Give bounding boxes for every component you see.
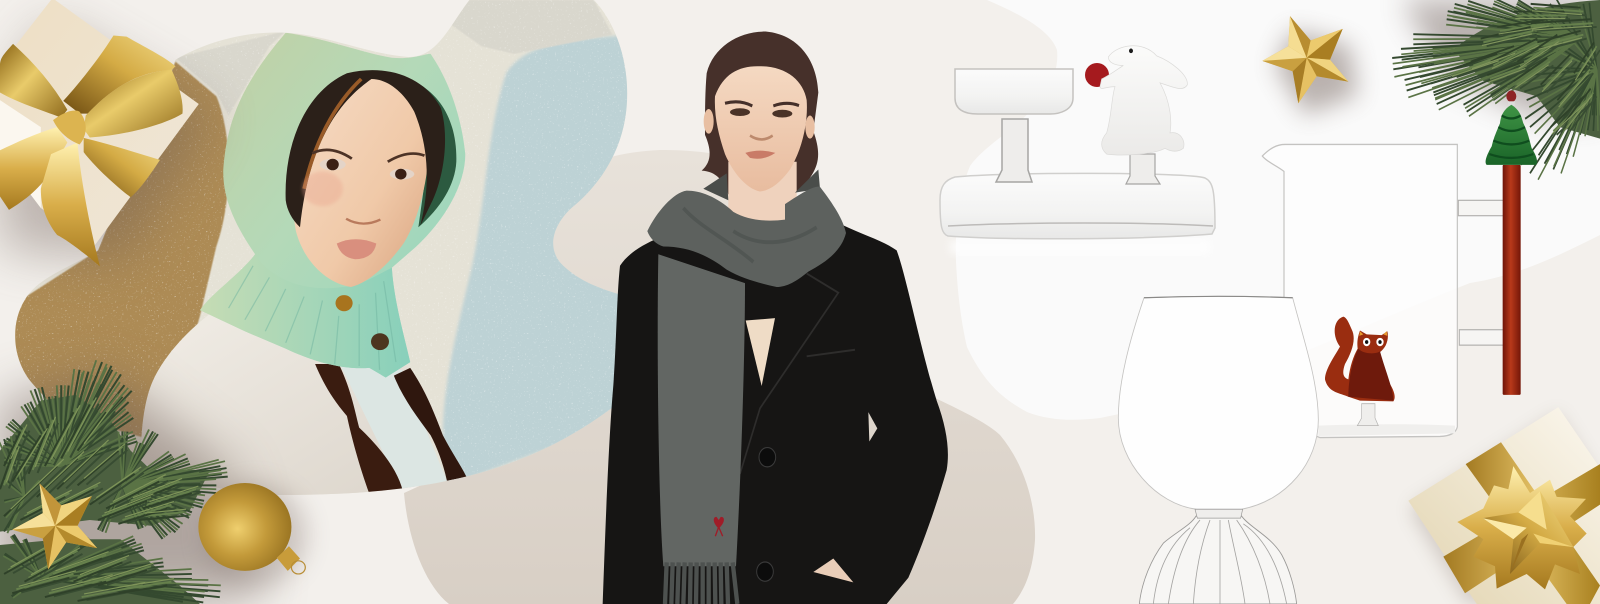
hood interior xyxy=(418,85,456,227)
gift shadow xyxy=(1408,414,1600,604)
blush xyxy=(302,171,343,206)
dark hair xyxy=(286,70,445,227)
base reflection xyxy=(950,240,1210,254)
lips xyxy=(745,151,775,159)
gold bauble xyxy=(198,483,305,574)
hair and bun xyxy=(702,32,818,195)
left photo: woman in mint knit hood xyxy=(0,0,640,501)
eyebrows xyxy=(312,150,424,162)
black coat xyxy=(603,225,948,604)
wine glass fluted foot xyxy=(1139,516,1297,604)
glass squirrel figurine xyxy=(1325,317,1395,401)
white background blob xyxy=(956,0,1600,420)
button two xyxy=(757,562,773,581)
bunny stem xyxy=(1126,154,1160,184)
neck xyxy=(728,162,797,320)
right braid xyxy=(394,368,467,481)
orange hair highlight xyxy=(304,79,361,189)
knit hood and neck xyxy=(200,33,465,377)
pale blue inner top xyxy=(341,366,447,491)
ribbed collar xyxy=(200,254,410,377)
red handle rod xyxy=(1503,165,1521,395)
box bright corner xyxy=(0,100,41,208)
nose xyxy=(750,136,773,139)
button one xyxy=(759,448,776,467)
armhole gap xyxy=(868,412,877,441)
short branch needles xyxy=(1451,4,1600,135)
solid branch mass xyxy=(0,395,210,604)
vertical ribbon band xyxy=(1466,442,1600,604)
jug base reflection xyxy=(1318,424,1455,436)
mid needles xyxy=(0,359,230,598)
scarf fringe xyxy=(665,562,737,604)
pine branches bottom left xyxy=(0,358,305,604)
right photo: person in black coat and grey scarf xyxy=(603,32,948,604)
top right shadow and pine xyxy=(1390,0,1600,182)
eyes xyxy=(730,108,792,117)
short branch needles xyxy=(0,398,201,601)
box body xyxy=(1408,407,1600,604)
wine glass bowl xyxy=(1118,296,1318,509)
foot flutes xyxy=(1153,520,1287,604)
scarf wrap xyxy=(647,187,846,287)
wine glass rim xyxy=(1144,296,1293,298)
blue wall shadow xyxy=(443,35,637,485)
squirrel and wine glass xyxy=(1118,296,1395,604)
hanging scarf xyxy=(658,254,745,566)
glass tree topper xyxy=(1486,91,1537,165)
gift box top left xyxy=(0,0,199,267)
solid branch mass xyxy=(1453,0,1600,139)
glass candle holder xyxy=(940,63,1215,254)
top star shadow xyxy=(1275,30,1358,115)
face xyxy=(293,73,429,287)
glitter specks xyxy=(0,0,640,501)
glass plate xyxy=(940,173,1215,239)
glass stem xyxy=(996,119,1032,182)
gold star bow xyxy=(1457,466,1587,589)
lapel seam xyxy=(740,273,855,474)
left braid xyxy=(315,364,403,494)
inner cream top xyxy=(746,318,775,386)
glass cup xyxy=(955,69,1073,114)
white bunny figurine xyxy=(1100,46,1187,155)
plate rim line xyxy=(948,223,1213,226)
mid needles xyxy=(1392,0,1600,182)
cross ribbon band xyxy=(1443,464,1600,593)
hand in pocket xyxy=(813,559,853,582)
jug upper handle xyxy=(1458,200,1504,216)
right ear xyxy=(805,116,815,139)
photo backdrop xyxy=(28,0,616,480)
lips xyxy=(337,239,376,259)
pine shadow xyxy=(1400,0,1600,116)
bunny eye xyxy=(1129,49,1133,53)
dark needles xyxy=(1390,0,1600,173)
red ball xyxy=(1085,63,1109,87)
jug, bunny and glass xyxy=(1100,46,1521,438)
golden wall shadow xyxy=(8,62,229,443)
taupe background blob xyxy=(404,150,1035,604)
left decoration shadows xyxy=(0,20,307,600)
collar ribs xyxy=(229,266,396,370)
wine glass neck xyxy=(1195,509,1243,518)
right eye xyxy=(390,169,414,180)
button bottom xyxy=(371,333,389,350)
red heart logo xyxy=(714,517,724,536)
squirrel glass stem xyxy=(1357,404,1378,426)
nose xyxy=(346,219,380,224)
white ribbed sweater xyxy=(142,314,430,495)
dark needles xyxy=(3,358,231,603)
jug body xyxy=(1262,144,1457,438)
scarf fold shadow xyxy=(683,208,817,262)
left ear xyxy=(704,109,714,134)
eyebrows xyxy=(725,102,799,106)
ribbon bow xyxy=(0,35,183,267)
box body xyxy=(0,0,199,247)
star ornament xyxy=(12,483,97,569)
jug lower handle xyxy=(1459,330,1504,345)
button top xyxy=(336,295,353,311)
grey upper backdrop xyxy=(176,0,612,116)
gold star top centre xyxy=(1262,16,1348,103)
scarf back loop xyxy=(703,169,820,200)
left eye xyxy=(320,159,346,170)
face xyxy=(715,66,807,191)
gift box bottom right xyxy=(1408,407,1600,604)
